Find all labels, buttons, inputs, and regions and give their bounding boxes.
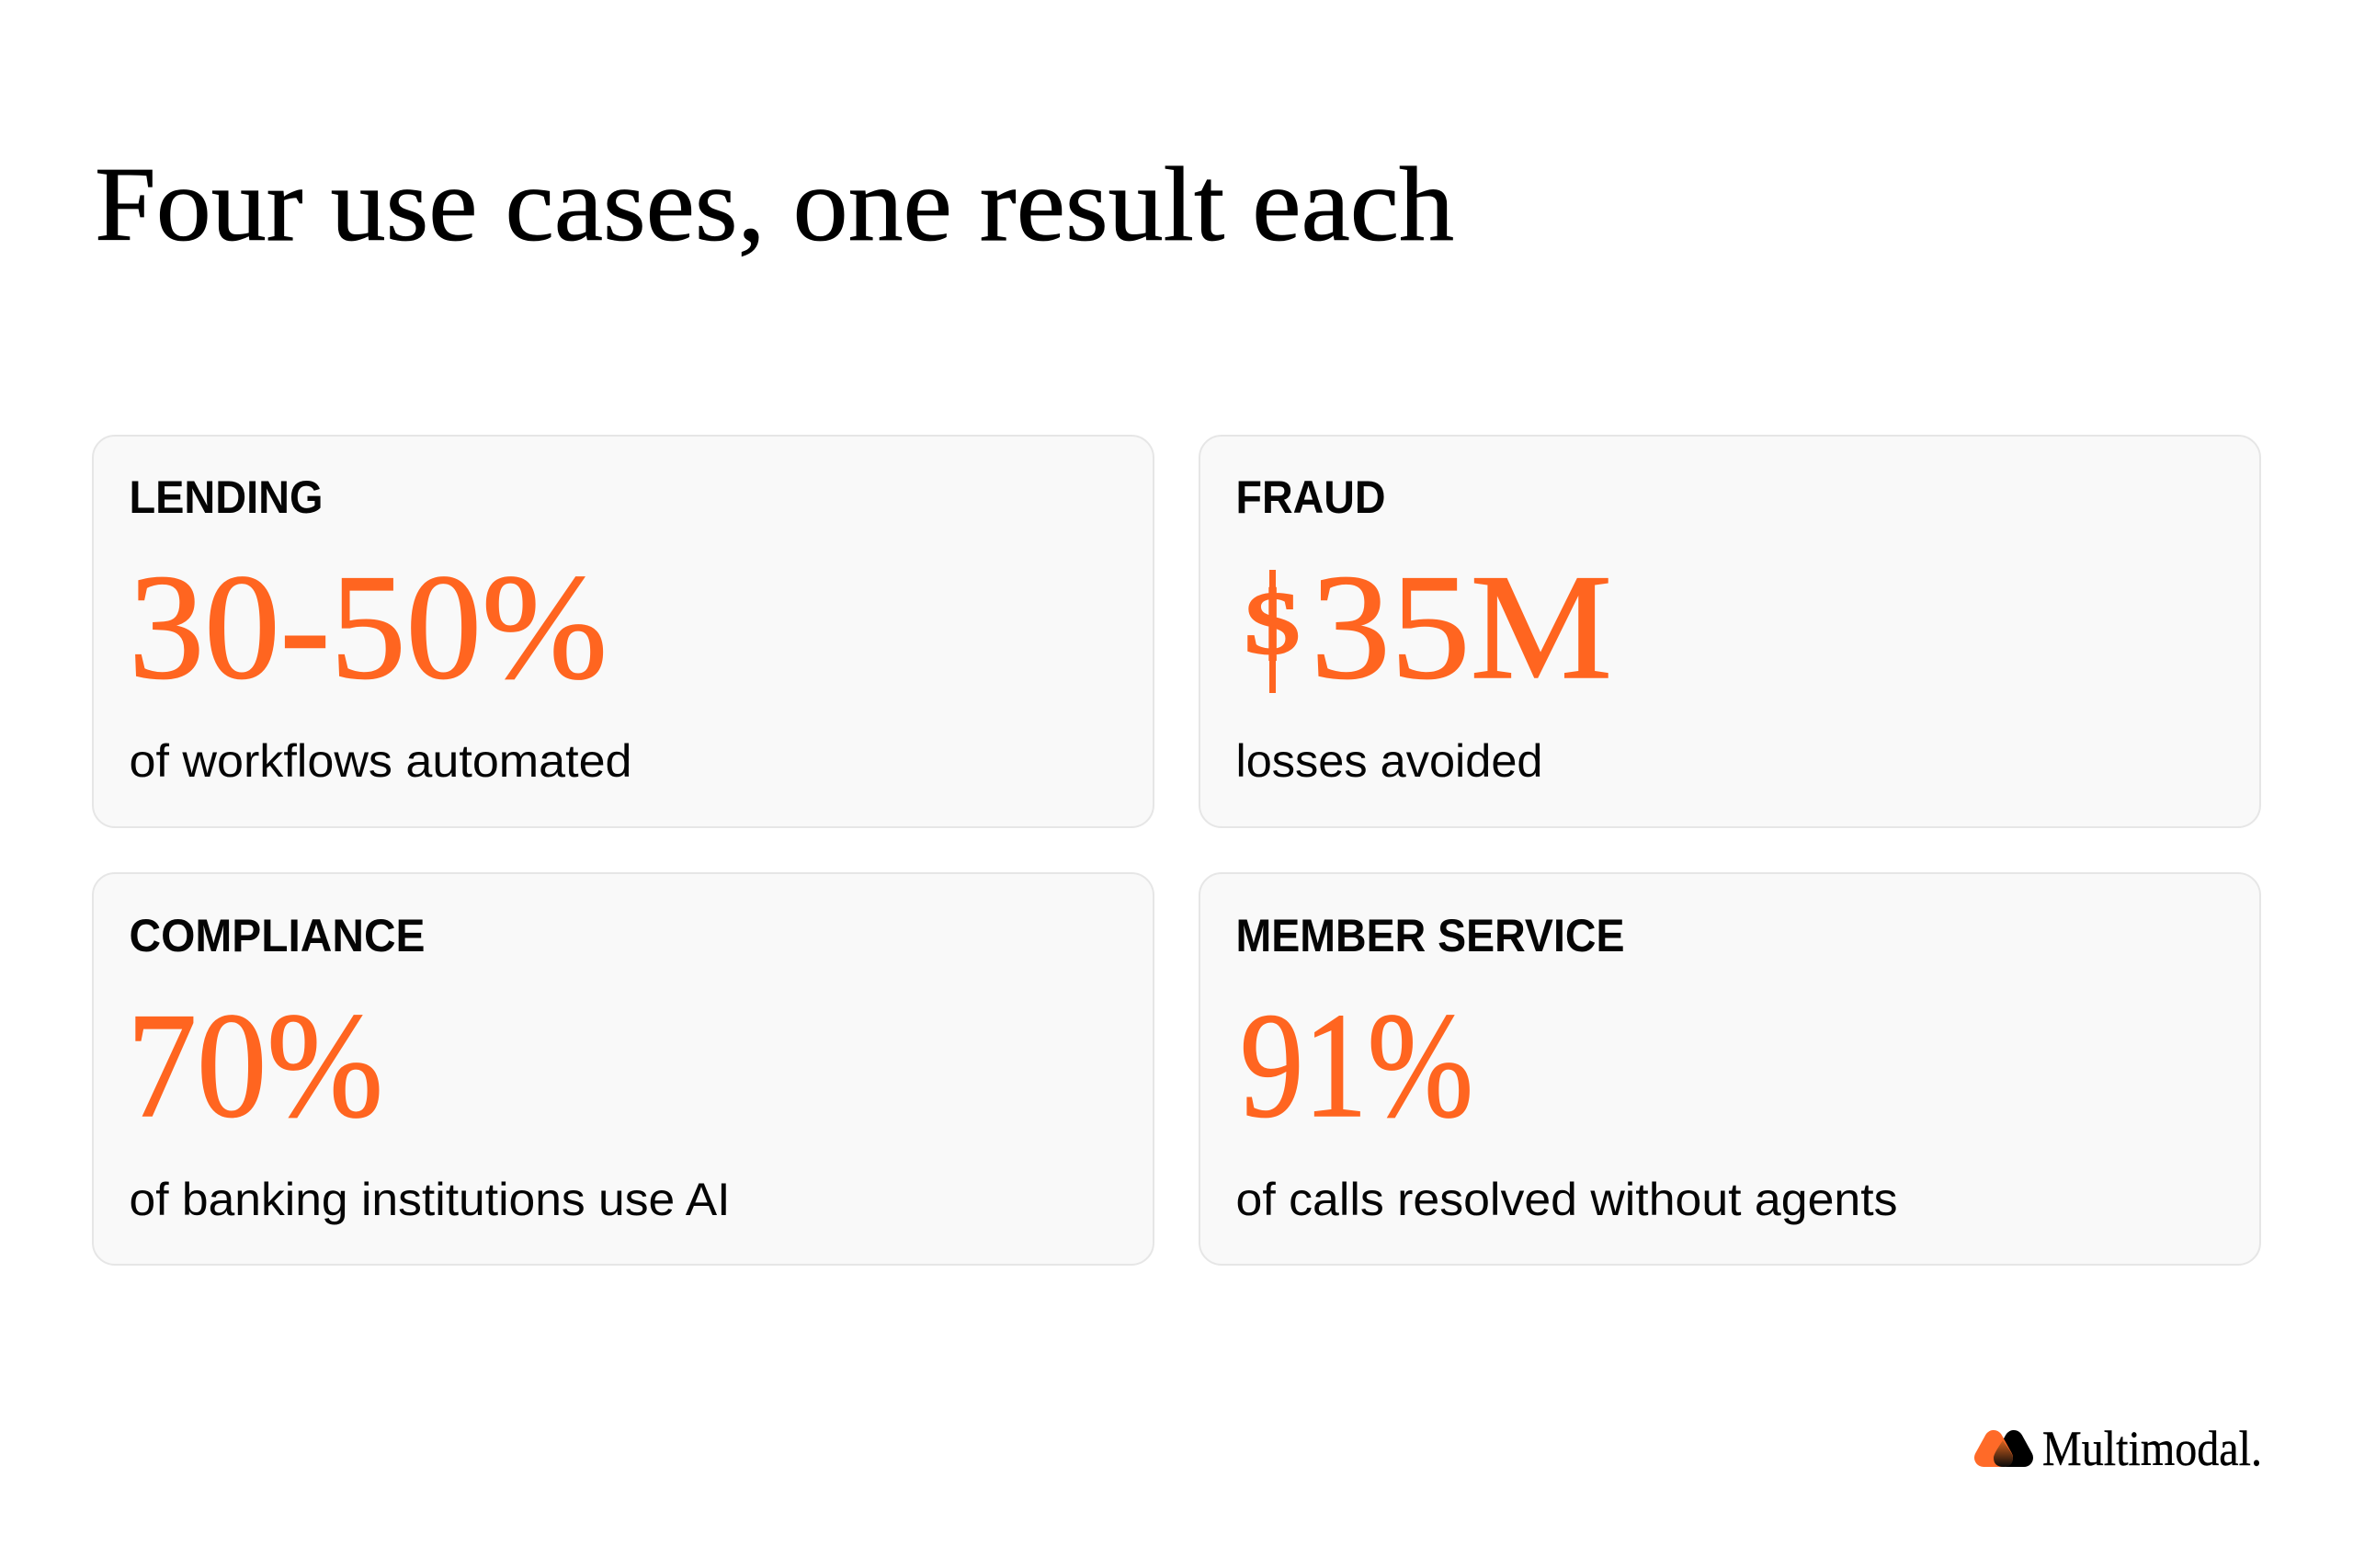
panel: lending bbox=[93, 436, 1154, 827]
compliance metric: 70% bbox=[127, 983, 383, 1149]
title: Four use cases, one result each bbox=[95, 146, 1454, 264]
compliance description: of banking institutions use AI bbox=[129, 1174, 730, 1225]
fraud label: FRAUD bbox=[1235, 472, 1386, 523]
lending metric: 30-50% bbox=[129, 544, 608, 710]
compliance label: COMPLIANCE bbox=[129, 910, 425, 961]
icon: logo mark bbox=[1984, 1439, 2024, 1467]
member service label: MEMBER SERVICE bbox=[1235, 910, 1625, 961]
fraud description: losses avoided bbox=[1235, 735, 1542, 787]
lending description: of workflows automated bbox=[129, 735, 632, 787]
member service metric: 91% bbox=[1240, 983, 1473, 1149]
logo: Multimodal bbox=[1984, 1421, 2262, 1476]
panel: compliance bbox=[93, 873, 1154, 1265]
panel: fraud bbox=[1199, 436, 2260, 827]
member service description: of calls resolved without agents bbox=[1235, 1174, 1897, 1225]
wordmark: Multimodal. bbox=[2042, 1421, 2262, 1476]
panel: member service bbox=[1199, 873, 2260, 1265]
fraud metric: 35M bbox=[1311, 544, 1612, 710]
fraud metric: $ bbox=[1245, 574, 1300, 672]
lending label: LENDING bbox=[129, 472, 324, 523]
